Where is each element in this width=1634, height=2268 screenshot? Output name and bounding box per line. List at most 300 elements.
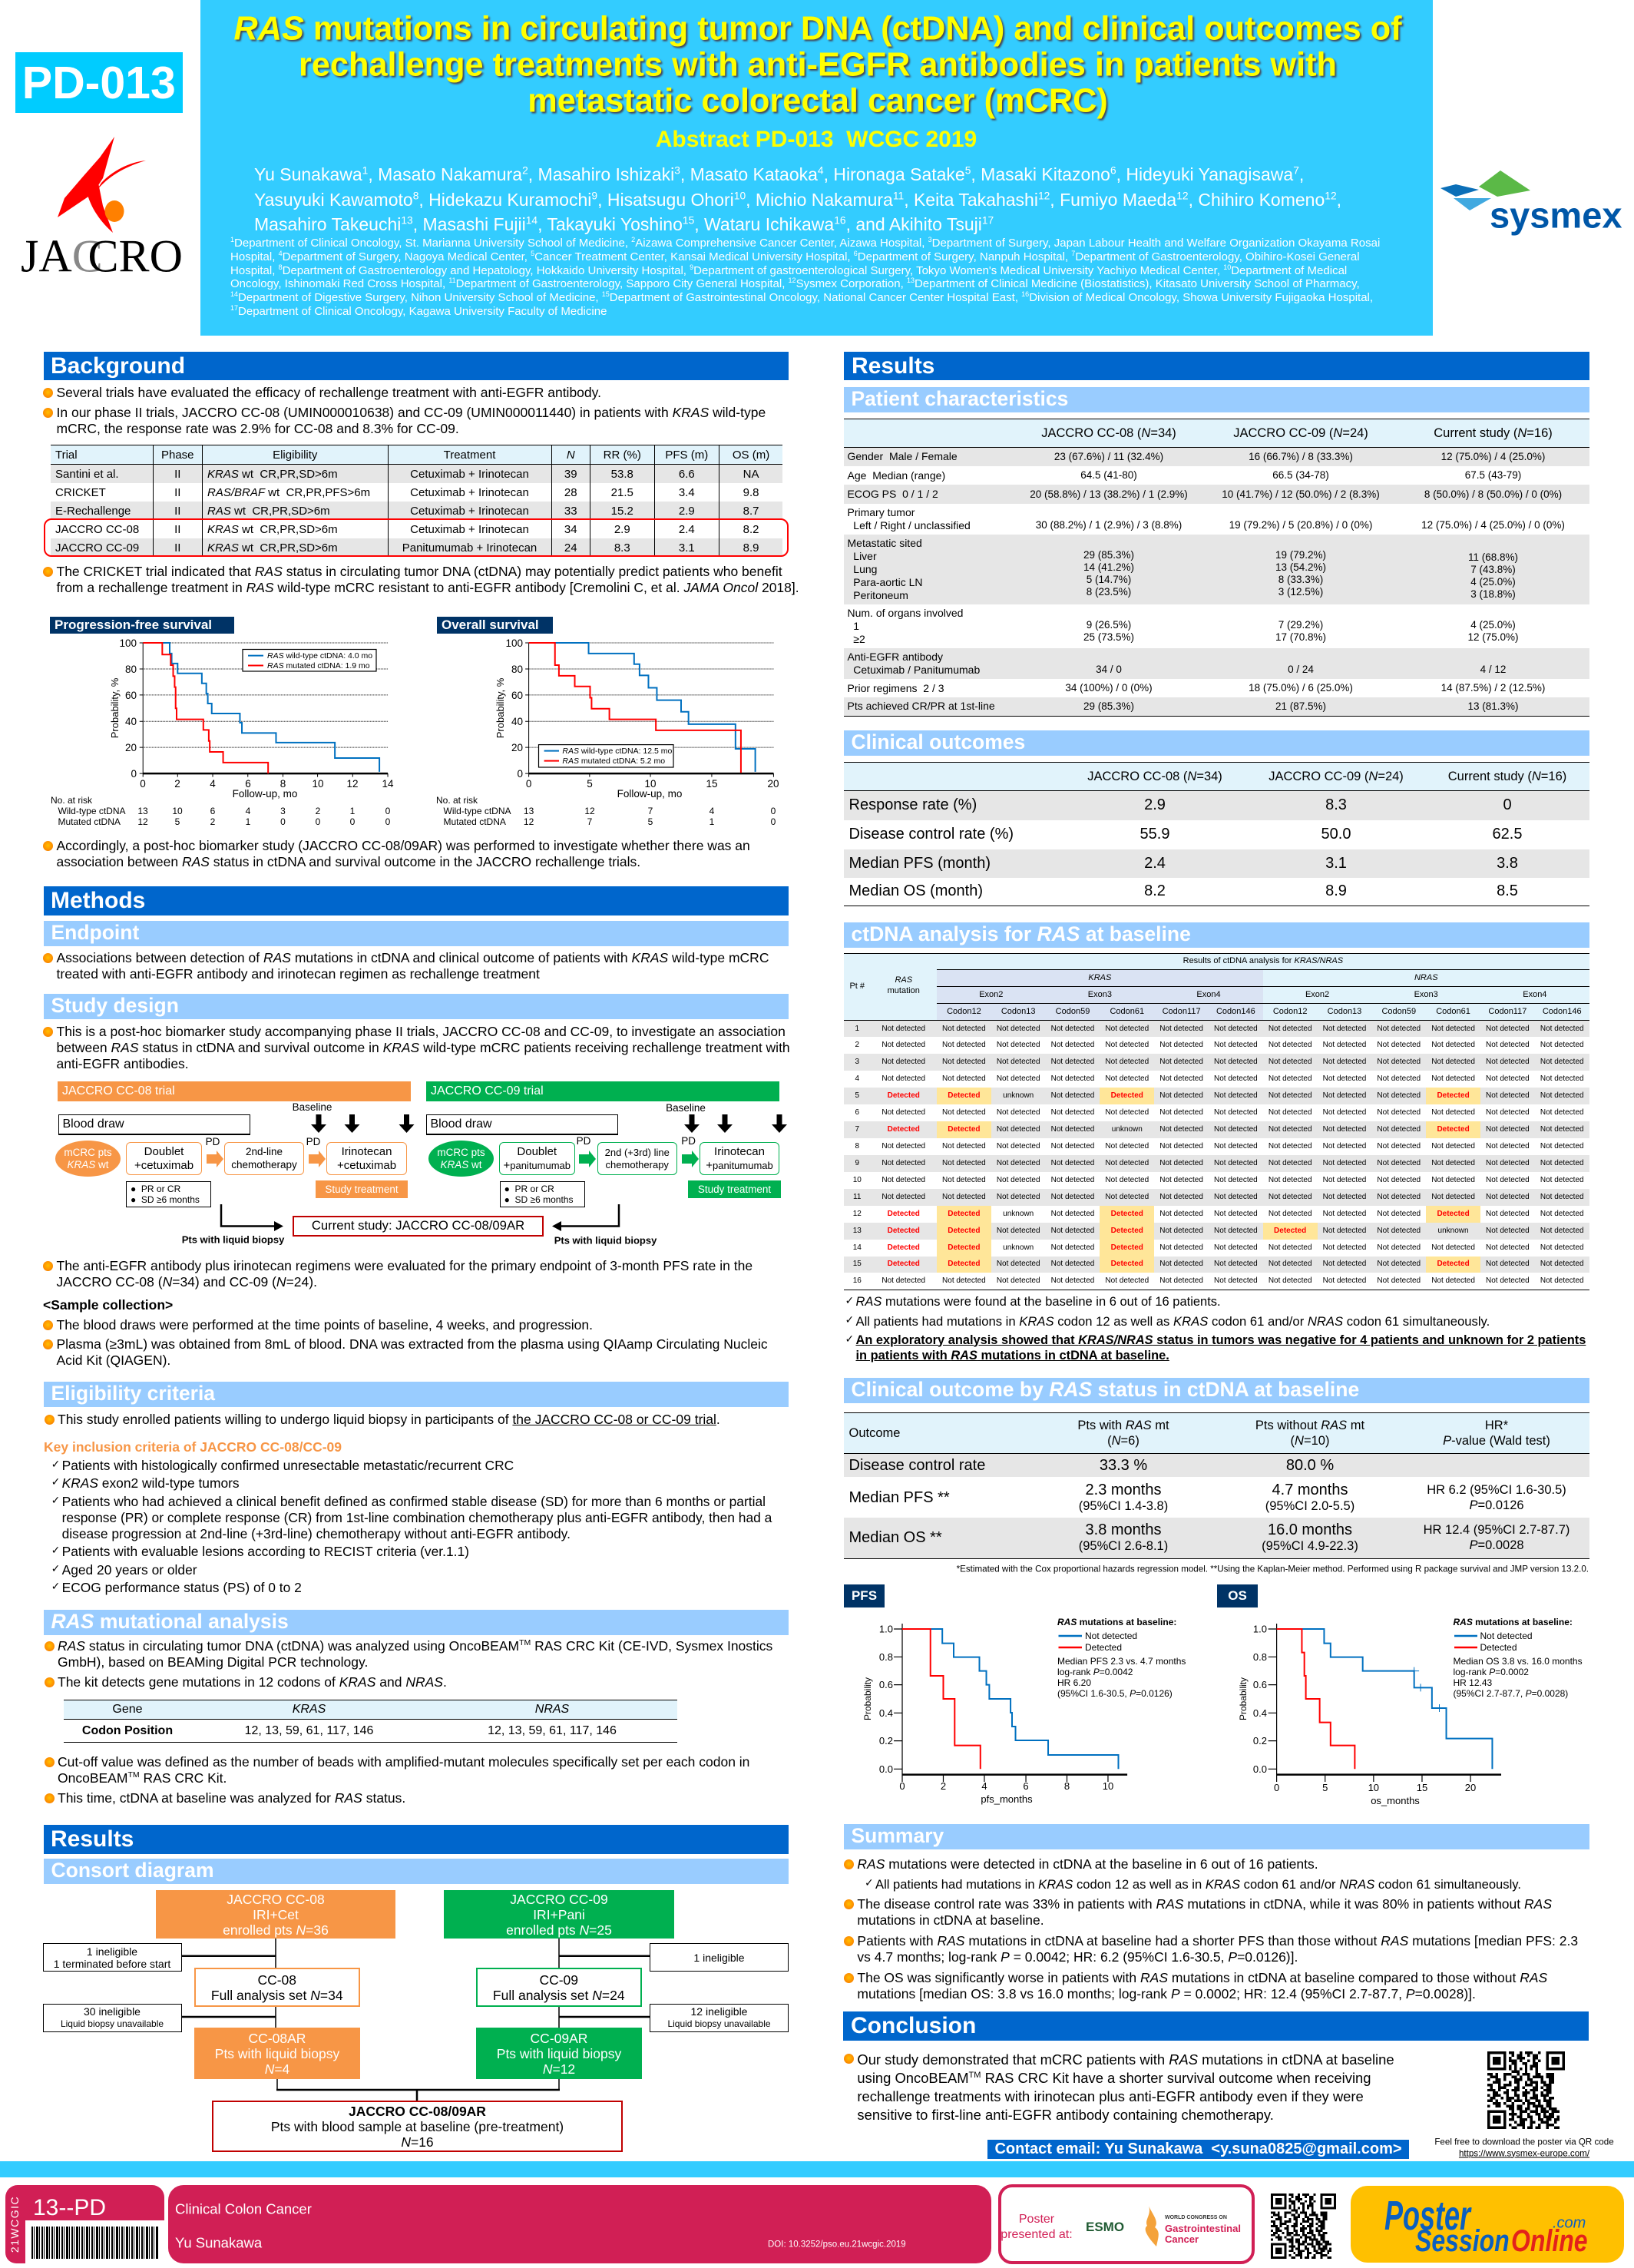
table: ctDNA results by patient: Detected [948,1260,981,1268]
table: prior rechallenge trials: JACCRO CC-08 [55,522,139,536]
chart: OS by RAS status: 0 [1274,1782,1279,1793]
table: ctDNA results by patient [844,952,1589,1290]
box: JACCRO CC-08/09AR: JACCRO CC-08/09AR [349,2103,486,2118]
box: blood draw CC-09: Blood draw [430,1117,492,1131]
label: PFS [844,1584,885,1607]
table: patient characteristics: JACCRO CC-09 (N=24) [1233,425,1368,439]
table: ctDNA results by patient: Not detected [942,1276,986,1285]
table: outcome by RAS status: P=0.0028 [1469,1538,1524,1552]
table: ctDNA results by patient: Codon61 [1436,1007,1470,1016]
table: ctDNA results by patient: Not detected [1051,1193,1094,1201]
affiliations: 17Department of Clinical Oncology, Kagawa University Faculty of Medicine [230,304,607,318]
table: prior rechallenge trials: 28 [564,485,577,499]
panel: poster session footer [5,2184,1624,2264]
chart: overall survival curves: Probability, % [495,677,506,738]
table: ctDNA results by patient: Not detected [1214,1276,1258,1285]
table: prior rechallenge trials: 6.6 [679,467,695,481]
table: prior rechallenge trials: KRAS wt CR,PR,SD>6m [207,467,338,481]
table: ctDNA results by patient: Not detected [1486,1193,1530,1201]
chart: PFS by RAS status: pfs_months [981,1793,1033,1805]
table: ctDNA results by patient: Not detected [1377,1142,1421,1151]
header: CC-09 trial: JACCRO CC-09 trial [431,1084,544,1098]
table: ctDNA results by patient: Not detected [1486,1159,1530,1167]
table: ctDNA results by patient: Not detected [1540,1074,1584,1083]
node: irinotecan cetuximab [326,1142,407,1175]
table: ctDNA results by patient: Not detected [1268,1108,1312,1117]
chart: progression-free survival curves: 0 [385,816,391,827]
table: ctDNA results by patient: Detected [888,1243,920,1252]
table: patient characteristics: 0 / 24 [1288,664,1314,675]
table: codon positions [64,1700,677,1743]
chart: OS by RAS status: RAS mutations at baseline: [1453,1617,1573,1627]
icon: congress emblem [1141,2206,1163,2247]
chart: overall survival curves: 10 [644,778,657,790]
table: ctDNA results by patient: Not detected [997,1176,1040,1184]
table: ctDNA results by patient: Not detected [997,1074,1040,1083]
table: ctDNA results by patient: Not detected [1540,1091,1584,1100]
table: clinical outcomes: Current study (N=16) [1448,770,1566,783]
text: CRICKET trial: The CRICKET trial indicated that RAS status in circulating tumor DNA (ctDNA) may potentially predict patients who benefit [57,564,782,579]
poster header [15,0,1622,336]
table: patient characteristics: 4 (25.0%) [1470,619,1516,631]
label: baseline CC-09: Baseline [666,1102,706,1114]
table: ctDNA results by patient: 12 [853,1210,862,1218]
heading: results: Results [852,353,934,378]
box: CC-09 full analysis set: Full analysis set N=24 [493,1988,625,2003]
table: ctDNA results by patient: Not detected [1268,1091,1312,1100]
chart: OS by RAS status: 5 [1322,1782,1328,1793]
table: patient characteristics: Pts achieved CR/PR at 1st-line [848,700,995,712]
box: CC-08 ineligible: 1 ineligible [87,1945,137,1957]
table: patient characteristics: 9 (26.5%) [1087,619,1131,631]
chart: PFS by RAS status: 6 [1023,1780,1029,1792]
logo text: Online: Online [1511,2223,1588,2258]
chart: progression-free survival curves: 20 [125,742,137,753]
heading: endpoint: Endpoint [51,920,139,943]
table: ctDNA results by patient: Not detected [1051,1227,1094,1235]
label: poster number: 13--PD [33,2195,106,2220]
panel: ctDNA analysis [844,922,1589,1362]
table: ctDNA results by patient: Not detected [1051,1041,1094,1049]
table: ctDNA results by patient: Pt # [849,982,865,991]
chart: OS by RAS status: 0.0 [1253,1763,1267,1775]
table: ctDNA results by patient: Detected [1437,1091,1470,1100]
label: baseline CC-08: Baseline [293,1101,332,1113]
table: prior rechallenge trials: Eligibility [273,449,317,461]
table: ctDNA results by patient: Not detected [1486,1025,1530,1033]
table: ctDNA results by patient: 5 [855,1091,859,1100]
table: outcome by RAS status: HR 6.2 (95%CI 1.6-30.5) [1427,1482,1566,1496]
table: ctDNA results by patient: Not detected [942,1142,986,1151]
table: patient characteristics: 3 (18.8%) [1470,588,1516,600]
table: ctDNA results by patient: Not detected [1486,1058,1530,1066]
table: ctDNA results by patient: Not detected [882,1041,925,1049]
box: response criteria CC-08 [126,1181,210,1207]
table: ctDNA results by patient: Not detected [1051,1091,1094,1100]
node: irinotecan cetuximab: Irinotecan [342,1144,392,1158]
text: summary OS [857,1970,1547,2002]
table: ctDNA results by patient: Not detected [1159,1193,1203,1201]
table: ctDNA results by patient: 8 [855,1142,859,1151]
table: patient characteristics: 66.5 (34-78) [1272,469,1329,481]
chart: OS by RAS status: 0.8 [1253,1651,1267,1663]
table: prior rechallenge trials: Santini et al. [55,467,119,481]
box: CC-08 biopsy unavailable: Liquid biopsy unavailable [61,2018,164,2029]
heading: clinical outcomes [844,730,1589,756]
table: codon positions: KRAS [293,1703,326,1716]
table: clinical outcomes: 0 [1503,796,1512,813]
table: outcome by RAS status: Median PFS ** [849,1488,950,1505]
table: codon positions: Codon Position [82,1723,173,1737]
table: ctDNA results by patient: Detected [948,1210,981,1218]
table: ctDNA results by patient: Not detected [1214,1074,1258,1083]
table: patient characteristics: 1 [853,619,859,631]
table: prior rechallenge trials: II [174,541,180,555]
heading: study design: Study design [51,994,179,1017]
heading: results [844,352,1589,380]
table: clinical outcomes: Median PFS (month) [849,854,991,871]
table: patient characteristics: 19 (79.2%) / 5 (20.8%) / 0 (0%) [1229,519,1372,531]
chart: overall survival curves [436,637,779,827]
table: ctDNA results by patient: Codon12 [1273,1007,1307,1016]
panel: methods endpoint [43,886,789,982]
table: ctDNA results by patient: Not detected [1268,1025,1312,1033]
authors: Yu Sunakawa1, Masato Nakamura2, Masahiro Ishizaki3, Masato Kataoka4, Hironaga Satake5, Masaki Kitazono6, Hideyuki Yanagisawa7, [254,164,1304,184]
table: ctDNA results by patient: Not detected [1214,1159,1258,1167]
chart: PFS by RAS status: 0.8 [879,1651,893,1663]
panel: RAS mutational analysis [44,1610,789,1805]
chart: PFS by RAS status [862,1617,1186,1805]
table: ctDNA results by patient: Not detected [1268,1193,1312,1201]
heading: summary [844,1824,1589,1849]
chart: overall survival curves: 4 [710,806,715,816]
table: ctDNA results by patient: Not detected [1377,1193,1421,1201]
authors: Masahiro Takeuchi13, Masashi Fujii14, Takayuki Yoshino15, Wataru Ichikawa16, and Akihito Tsuji17 [254,214,994,234]
chart: progression-free survival curves: 13 [137,806,148,816]
text: summary disease control: mutations in ctDNA at baseline. [857,1912,1044,1928]
header: CC-08 trial: JACCRO CC-08 trial [62,1084,175,1098]
box: JACCRO CC-08/09AR: Pts with blood sample at baseline (pre-treatment) [271,2118,564,2134]
chart: OS by RAS status: 15 [1417,1782,1427,1793]
logo text: .com: .com [1553,2215,1586,2232]
chart: overall survival curves: 0 [517,768,523,780]
text: endpoint: Associations between detection of RAS mutations in ctDNA and clinical outcome of patients with KRAS wild-type mCRC [57,949,769,965]
panel: patient characteristics [844,352,1589,717]
chart: PFS by RAS status: log-rank P=0.0042 [1057,1667,1133,1677]
table: ctDNA results by patient: Codon117 [1488,1007,1526,1016]
table: prior rechallenge trials: 8.7 [743,504,759,518]
criterion 1: Patients with histologically confirmed unresectable metastatic/recurrent CRC [62,1458,514,1473]
table: ctDNA results by patient: Not detected [1051,1074,1094,1083]
text: summary disease control [857,1896,1552,1929]
heading: conclusion: Conclusion [851,2013,976,2038]
table: ctDNA results by patient: Not detected [1159,1227,1203,1235]
table: outcome by RAS status: HR 12.4 (95%CI 2.7-87.7) [1424,1523,1570,1537]
header: CC-08 trial [58,1081,411,1101]
node: mCRC pts CC-09: KRAS wt [440,1158,482,1170]
table: ctDNA results by patient: Not detected [1431,1108,1475,1117]
table: prior rechallenge trials: KRAS wt CR,PR,SD>6m [207,522,338,536]
text: conclusion: sensitive to first-line anti-EGFR antibody containing chemotherapy. [857,2107,1274,2123]
heading: consort diagram [44,1859,789,1884]
table: ctDNA results by patient: Not detected [1540,1193,1584,1201]
logo: ESMO: ESMO [1086,2220,1124,2234]
table: codon positions: 12, 13, 59, 61, 117, 146 [488,1723,617,1737]
table: ctDNA results by patient: Not detected [882,1193,925,1201]
table: patient characteristics: 3 (12.5%) [1278,586,1323,598]
text: cut-off: OncoBEAMTM RAS CRC Kit. [58,1770,227,1785]
table: ctDNA results by patient: Not detected [1377,1125,1421,1134]
chart: progression-free survival curves: RAS wild-type ctDNA: 4.0 mo [267,651,372,661]
table: ctDNA results by patient: Detected [888,1260,920,1268]
box: CC-09 biopsy unavailable [650,2004,789,2032]
table: prior rechallenge trials: OS (m) [733,449,769,461]
table: ctDNA results by patient: Not detected [1268,1074,1312,1083]
panel: eligibility criteria [44,1381,789,1594]
table: prior rechallenge trials: JACCRO CC-09 [55,541,139,555]
text: summary OS: mutations [median OS: 3.8 vs 16.0 months; log-rank P = 0.0002; HR: 12.4 (95%CI 2.7-87.7, P=0.0028)]. [857,1986,1476,2001]
table: ctDNA results by patient: Not detected [997,1276,1040,1285]
chart: OS by RAS status: 0.4 [1253,1707,1267,1719]
chart: progression-free survival curves: 12 [137,816,148,827]
chart: progression-free survival curves: 40 [125,716,137,727]
node: 2nd or 3rd line chemotherapy: chemotherapy [606,1158,669,1170]
text: exploratory analysis [855,1332,1586,1364]
table: ctDNA results by patient: Exon3 [1414,990,1438,999]
chart: OS by RAS status: log-rank P=0.0002 [1453,1667,1529,1677]
table: ctDNA results by patient: Not detected [1214,1193,1258,1201]
chart: overall survival curves: Mutated ctDNA [444,816,506,827]
table: ctDNA results by patient: Not detected [1268,1125,1312,1134]
chart: PFS by RAS status: 0.0 [879,1763,893,1775]
chart: PFS by RAS status: 0 [899,1780,905,1792]
table: ctDNA results by patient: Codon59 [1056,1007,1090,1016]
box: response criteria CC-09 [500,1181,585,1207]
table: ctDNA results by patient: Not detected [1214,1227,1258,1235]
table: ctDNA results by patient: Not detected [1159,1176,1203,1184]
table: ctDNA results by patient: Not detected [1540,1227,1584,1235]
table: patient characteristics: Peritoneum [853,588,908,601]
table: ctDNA results by patient: Not detected [882,1074,925,1083]
label: category: Clinical Colon Cancer [175,2200,312,2217]
table: ctDNA results by patient: Not detected [1323,1193,1366,1201]
text: primary endpoint [57,1258,752,1290]
table: ctDNA results by patient: unknown [1112,1125,1143,1134]
table: ctDNA results by patient: Not detected [1214,1108,1258,1117]
node: mCRC pts CC-09: mCRC pts [437,1146,485,1158]
table: ctDNA results by patient: 7 [855,1125,859,1134]
table: patient characteristics: 21 (87.5%) [1275,700,1326,712]
text: endpoint [57,949,769,982]
heading: methods [44,886,789,915]
table: ctDNA results by patient: Not detected [1323,1142,1366,1151]
table: outcome by RAS status: (95%CI 1.4-3.8) [1079,1499,1168,1513]
box: response criteria CC-09: ● PR or CR [504,1184,554,1194]
chart: progression-free survival curves: 0 [385,806,391,816]
text: phase II trials: mCRC, the response rate was 2.9% for CC-08 and 8.3% for CC-09. [57,421,459,436]
table: prior rechallenge trials: Treatment [444,449,495,461]
heading: RAS mutational analysis [44,1610,789,1635]
table: ctDNA results by patient: Not detected [942,1041,986,1049]
table: ctDNA results by patient: Not detected [942,1074,986,1083]
chart: progression-free survival curves: 1 [350,806,356,816]
table: patient characteristics: 7 (43.8%) [1470,564,1516,575]
chart: progression-free survival curves: 3 [280,806,286,816]
panel: background [43,352,799,869]
table: ctDNA results by patient: Not detected [997,1227,1040,1235]
label: study treatment CC-08: Study treatment [325,1184,399,1195]
chart: PFS by RAS status: 10 [1103,1780,1113,1792]
chart: progression-free survival curves: 10 [312,778,324,790]
table: ctDNA results by patient: Detected [888,1210,920,1218]
table: patient characteristics: Left / Right / unclassified [853,519,971,531]
chart: OS by RAS status: Median OS 3.8 vs. 16.0 months [1453,1656,1583,1667]
panel: clinical outcomes [844,730,1589,906]
text: cut-off [58,1754,749,1786]
table: ctDNA results by patient: Detected [888,1227,920,1235]
chart: PFS by RAS status: Not detected [1085,1631,1137,1641]
chart: overall survival curves: RAS wild-type ctDNA: 12.5 mo [562,747,673,756]
node: mCRC pts CC-08: KRAS wt [67,1158,109,1170]
table: patient characteristics: 67.5 (43-79) [1465,469,1521,481]
chart: progression-free survival curves: 14 [382,778,394,790]
table: ctDNA results by patient: Codon61 [1110,1007,1144,1016]
table: prior rechallenge trials: N [567,449,575,461]
icon: Sysmex diamonds [1440,171,1530,210]
table: outcome by RAS status: (N=10) [1291,1433,1329,1447]
table: ctDNA results by patient: 13 [853,1227,862,1235]
table: ctDNA results by patient: Detected [1437,1210,1470,1218]
chart: progression-free survival curves: 6 [245,778,251,790]
table: clinical outcomes: 8.2 [1144,882,1166,899]
table: ctDNA results by patient: Detected [948,1243,981,1252]
panel: consort diagram [43,1825,789,2152]
table: ctDNA results by patient: Not detected [997,1159,1040,1167]
chart: overall survival curves: 60 [511,690,523,701]
table: prior rechallenge trials: E-Rechallenge [55,504,131,518]
table: patient characteristics: 11 (68.8%) [1468,551,1518,563]
node: 2nd-line chemotherapy: 2nd-line [246,1146,283,1157]
table: ctDNA results by patient: Not detected [1323,1176,1366,1184]
chart: PFS by RAS status: (95%CI 1.6-30.5, P=0.0126) [1057,1688,1173,1699]
table: ctDNA results by patient: Not detected [1105,1074,1149,1083]
table: ctDNA results by patient: Not detected [997,1125,1040,1134]
label: congress name: WORLD CONGRESS ON [1165,2215,1227,2220]
table: ctDNA results by patient: Not detected [1540,1025,1584,1033]
node: mCRC pts CC-09 [428,1141,494,1177]
table: outcome by RAS status: P-value (Wald test) [1443,1433,1550,1447]
table: patient characteristics: Age Median (range) [848,468,945,481]
table: clinical outcomes: Disease control rate (%) [849,826,1014,843]
list: inclusion criteria [52,1458,772,1594]
table: ctDNA results by patient: Not detected [1540,1210,1584,1218]
table: ctDNA results by patient: Codon59 [1381,1007,1416,1016]
chart: progression-free survival curves: 0 [280,816,286,827]
table: ctDNA results by patient: Not detected [1268,1176,1312,1184]
chart: OS by RAS status: Probability [1238,1677,1249,1720]
table: ctDNA results by patient: Not detected [1431,1243,1475,1252]
chart: overall survival curves: 20 [767,778,779,790]
table: prior rechallenge trials: II [174,485,180,499]
table: ctDNA results by patient: Not detected [1159,1108,1203,1117]
heading: results [44,1825,789,1854]
box: CC-09 enrolled: enrolled pts N=25 [506,1922,612,1937]
table: ctDNA results by patient: Not detected [1051,1210,1094,1218]
table: ctDNA results by patient: Not detected [1159,1074,1203,1083]
table: patient characteristics: 23 (67.6%) / 11 (32.4%) [1054,451,1163,462]
table: ctDNA results by patient: Not detected [1323,1260,1366,1268]
node: 2nd or 3rd line chemotherapy: 2nd (+3rd) line [605,1146,670,1158]
heading: ctDNA analysis for RAS at baseline [844,922,1589,948]
table: ctDNA results by patient: Not detected [1051,1159,1094,1167]
table: ctDNA results by patient: Not detected [997,1041,1040,1049]
table: ctDNA results by patient: Not detected [1431,1025,1475,1033]
title panel [200,0,1433,336]
table: ctDNA results by patient: mutation [888,986,920,995]
chart: PFS by RAS status: 1.0 [879,1624,893,1634]
table: ctDNA results by patient: Not detected [1105,1276,1149,1285]
table: prior rechallenge trials: 21.5 [611,485,633,499]
panel: poster presented at [998,2184,1255,2264]
table: ctDNA results by patient: Detected [1111,1260,1143,1268]
node: doublet cetuximab: Doublet [144,1144,184,1158]
table: ctDNA results by patient: 4 [855,1074,859,1083]
affiliations: 14Department of Digestive Surgery, Nihon University School of Medicine, 15Department of Gastrointestinal Oncology, National Cancer Center Hospital East, 16Division of Medical Oncology, Showa University Fujigaoka Hospital, [230,290,1373,304]
node: doublet panitumumab: +panitumumab [503,1158,571,1172]
table: ctDNA results by patient: Not detected [1159,1142,1203,1151]
table: prior rechallenge trials: Panitumumab + Irinotecan [402,541,537,555]
table: patient characteristics: 13 (81.3%) [1467,700,1519,712]
table: ctDNA results by patient: Not detected [1323,1058,1366,1066]
table: outcome by RAS status: Median OS ** [849,1529,942,1546]
table: patient characteristics: ECOG PS 0 / 1 / 2 [848,488,938,500]
table: prior rechallenge trials: CRICKET [55,485,106,499]
box: CC-09AR [476,2028,642,2079]
footnote: *Estimated with the Cox proportional hazards regression model. **Using the Kaplan-Meier method. Performed using R package survival and JMP version 13.2.0. [957,1564,1589,1574]
text: CRICKET trial [57,564,799,596]
table: patient characteristics: Gender Male / Female [848,450,958,462]
logo text: Poster: Poster [1384,2192,1470,2239]
table: ctDNA results by patient: Not detected [1540,1142,1584,1151]
table: ctDNA results by patient: Detected [1111,1091,1143,1100]
label: congress name: Cancer [1165,2233,1199,2245]
chart: PFS by RAS status: 8 [1064,1780,1070,1792]
text: post-hoc biomarker study: Accordingly, a post-hoc biomarker study (JACCRO CC-08/09AR) was performed to investigate whether there was an [57,837,750,853]
chart: overall survival curves: 20 [511,742,523,753]
table: ctDNA results by patient: Not detected [997,1193,1040,1201]
badge: poster code [5,2185,164,2263]
table: ctDNA results by patient: Not detected [1540,1159,1584,1167]
arrows: liquid biopsy to current study [220,1204,620,1231]
table: ctDNA results by patient: Detected [1111,1210,1143,1218]
table: prior rechallenge trials: 9.8 [743,485,759,499]
chart: PFS by RAS status: 4 [981,1780,987,1792]
table: prior rechallenge trials: KRAS wt CR,PR,SD>6m [207,541,338,555]
box: CC-09 ineligible [650,1943,789,1972]
chart: PFS by RAS status: Median PFS 2.3 vs. 4.7 months [1057,1656,1186,1667]
table: ctDNA results by patient: 14 [853,1243,862,1252]
chart: overall survival curves: 0 [526,778,531,790]
label: study treatment CC-09 [688,1180,781,1198]
label: poster presented at [1001,2213,1073,2241]
table: clinical outcomes: Response rate (%) [849,796,977,813]
box: CC-08 enrolled: enrolled pts N=36 [223,1922,329,1937]
box: CC-08AR: CC-08AR [249,2031,306,2046]
chart: progression-free survival curves: 12 [346,778,359,790]
text: primary endpoint: JACCRO CC-08 (N=34) and CC-09 (N=24). [57,1273,317,1289]
chart: progression-free survival curves: 6 [210,806,216,816]
table: ctDNA results by patient: Not detected [1268,1210,1312,1218]
